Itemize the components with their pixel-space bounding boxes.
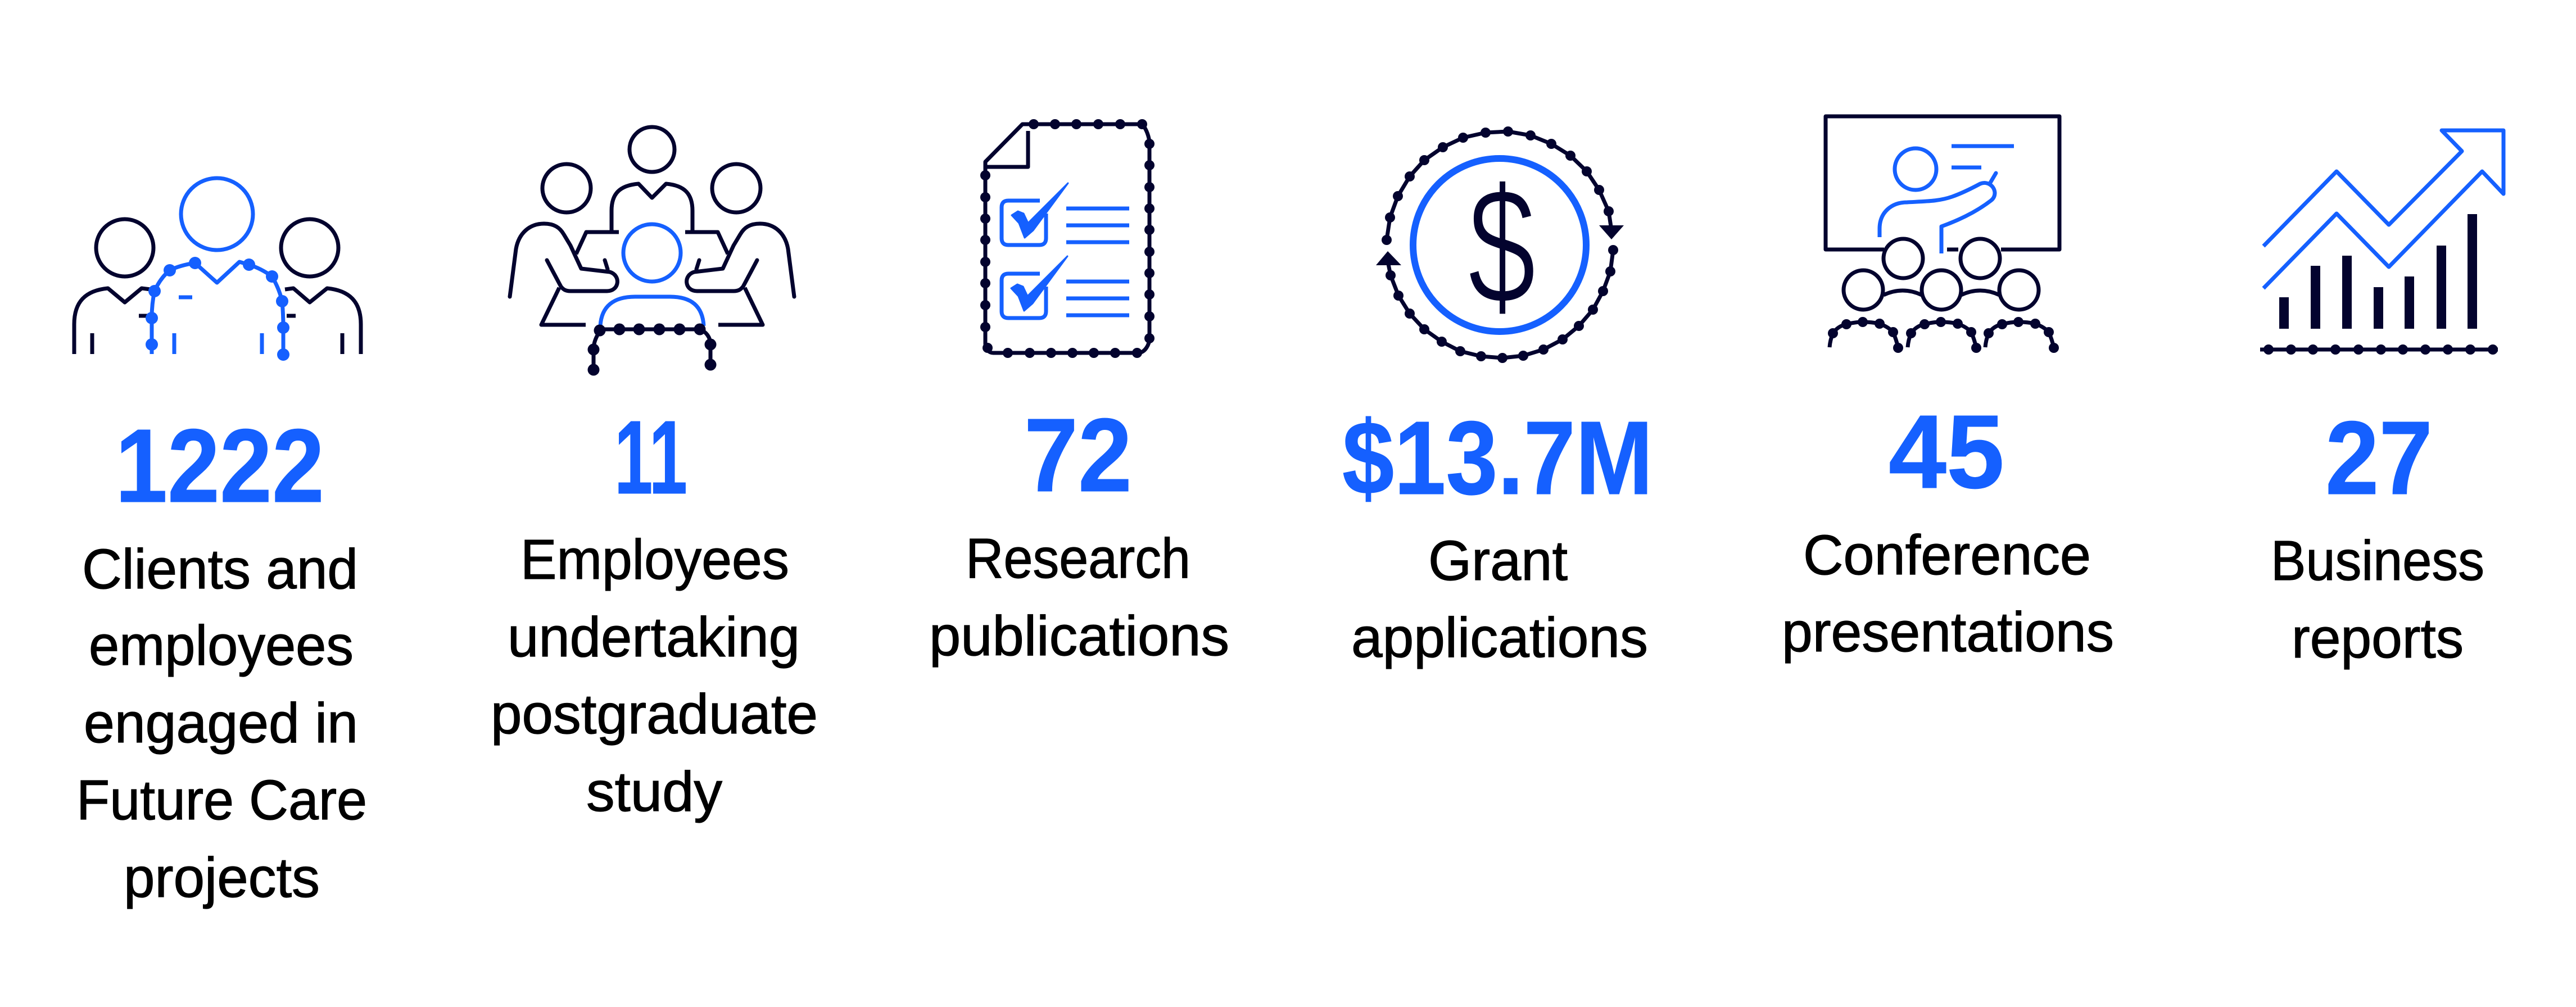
label: employees undertaking postgraduate study [491,528,818,823]
label: employees undertaking postgraduate study: undertaking [508,606,800,669]
icon: growth chart with arrow [2260,130,2503,355]
audience shoulders [1828,317,2059,353]
document outline [980,119,1155,358]
back person [612,127,692,230]
upper rotating arrow [1382,126,1624,245]
presentation board [1826,116,2059,250]
centre person in blue [146,178,289,361]
number: 72: 72 [1024,397,1132,514]
label: clients and employees engaged in Future Care projects: projects [124,846,320,909]
label: research publications: publications [929,605,1229,668]
dotted baseline [2260,344,2498,355]
number: 45: 45 [1889,394,2004,510]
left person and table edge [510,164,619,325]
label: grant applications: Grant [1428,529,1568,592]
panel: conference presentations [1782,116,2114,664]
icon: three people [74,178,361,361]
icon: checklist document [980,119,1155,358]
bars [2279,214,2477,329]
label: employees undertaking postgraduate study: Employees [520,528,789,591]
chair [588,324,716,375]
label: conference presentations [1782,524,2114,664]
icon: meeting around a table [510,127,794,375]
right person and table edge [685,164,794,325]
number: 27: 27 [2325,400,2433,516]
label: employees undertaking postgraduate study: postgraduate [491,683,818,746]
label: clients and employees engaged in Future Care projects: employees [89,614,354,677]
coin ring [1413,158,1586,332]
number: $13.7M: $13.7M [1342,400,1653,516]
rising arrow [2263,130,2503,288]
front person in blue [600,224,704,326]
icon: dollar coin with circular arrows [1376,126,1624,363]
label: business reports: reports [2292,607,2464,670]
panel: clients and employees [74,178,367,909]
number: 1222: 1222 [115,408,324,524]
right person [281,219,361,354]
dollar sign: $ [1468,153,1536,339]
panel: business reports [2260,130,2503,670]
label: research publications [929,527,1229,668]
first checklist row [1002,183,1129,245]
panel: research publications [929,119,1229,668]
label: grant applications: applications [1351,606,1648,669]
label: clients and employees engaged in Future Care projects: Future Care [76,769,367,832]
label: employees undertaking postgraduate study: study [586,760,722,823]
label: research publications: Research [966,527,1190,590]
label: conference presentations: Conference [1803,524,2091,587]
panel: postgraduate study [491,127,818,823]
label: clients and employees engaged in Future Care projects: Clients and [82,538,358,601]
label: business reports [2271,529,2484,670]
label: clients and employees engaged in Future Care projects [76,538,367,909]
second checklist row [1002,256,1129,318]
panel: grant applications [1342,126,1653,669]
audience heads [1844,239,2039,310]
lower rotating arrow [1376,245,1618,363]
presenter in blue [1880,146,2014,253]
label: conference presentations: presentations [1782,601,2114,664]
label: grant applications [1351,529,1648,669]
label: business reports: Business [2271,529,2484,592]
number: 11: 11 [614,400,687,516]
left person [74,219,153,354]
icon: presenter and audience [1826,116,2059,353]
label: clients and employees engaged in Future Care projects: engaged in [84,692,358,755]
